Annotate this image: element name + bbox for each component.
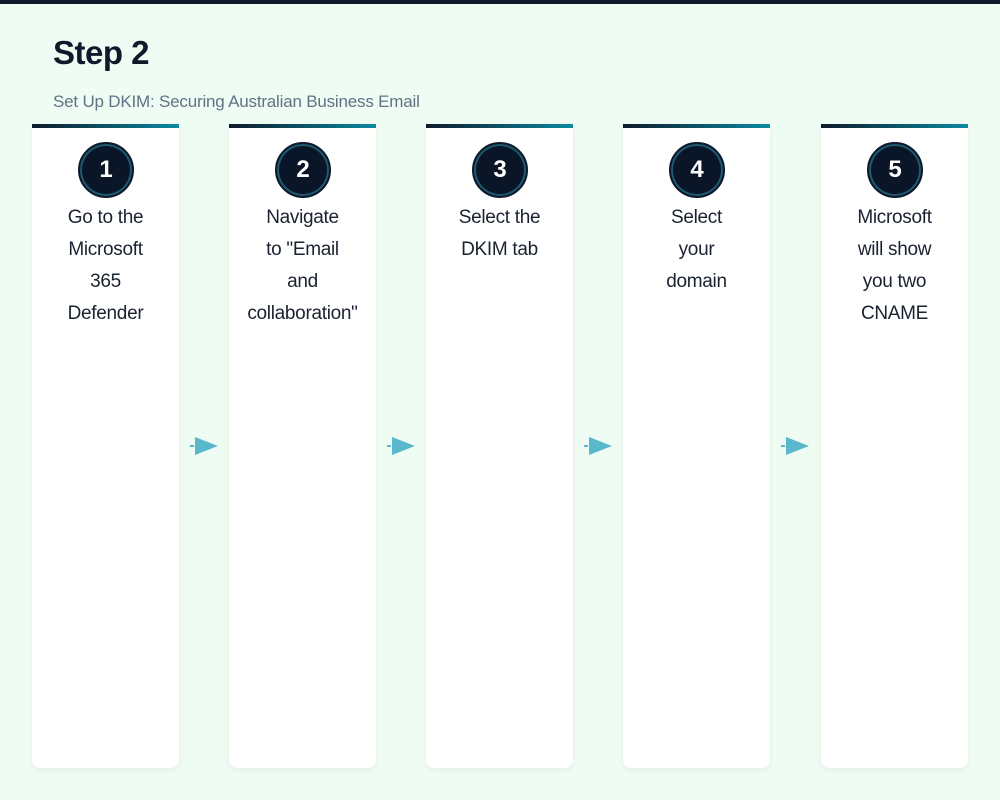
step number 5 bbox=[867, 142, 923, 198]
step 1 text: Microsoft bbox=[68, 239, 143, 260]
arrow 3 bbox=[584, 437, 612, 455]
step 1 text bbox=[68, 207, 144, 324]
step 5 text: will show bbox=[858, 239, 931, 260]
step 3 text: Select the bbox=[459, 207, 540, 228]
panel: step 5 bbox=[821, 124, 968, 768]
subtitle: Set Up DKIM: Securing Australian Business Email bbox=[53, 92, 420, 111]
step 3 text bbox=[459, 207, 540, 260]
step 5 text: Microsoft bbox=[857, 207, 932, 228]
panel: step 1 bbox=[32, 124, 179, 768]
step number 5: 5 bbox=[888, 156, 902, 183]
step 1 text: Go to the bbox=[68, 207, 143, 228]
panel: step 4 bbox=[623, 124, 770, 768]
step number 4 bbox=[669, 142, 725, 198]
arrow 1 bbox=[190, 437, 218, 455]
step 3 text: DKIM tab bbox=[461, 239, 538, 260]
step 2 text: and bbox=[287, 271, 318, 292]
step number 1: 1 bbox=[99, 156, 113, 183]
step 2 text: Navigate bbox=[266, 207, 339, 228]
step 2 text: to "Email bbox=[266, 239, 339, 260]
step number 4: 4 bbox=[690, 156, 704, 183]
arrow 4 bbox=[781, 437, 809, 455]
step 4 text: domain bbox=[666, 271, 727, 292]
step 4 text: Select bbox=[671, 207, 722, 228]
step number 2: 2 bbox=[296, 156, 310, 183]
step number 2 bbox=[275, 142, 331, 198]
step 4 text: your bbox=[679, 239, 714, 260]
step 5 text: CNAME bbox=[861, 303, 928, 324]
step number 1 bbox=[78, 142, 134, 198]
title: Step 2 bbox=[53, 34, 149, 71]
arrow 2 bbox=[387, 437, 415, 455]
panel: step 3 bbox=[426, 124, 573, 768]
step 4 text bbox=[666, 207, 727, 292]
step 5 text: you two bbox=[863, 271, 926, 292]
step 1 text: Defender bbox=[68, 303, 143, 324]
step 1 text: 365 bbox=[90, 271, 121, 292]
step number 3: 3 bbox=[493, 156, 507, 183]
panel: step 2 bbox=[229, 124, 376, 768]
step 2 text: collaboration" bbox=[247, 303, 358, 324]
step 2 text bbox=[247, 207, 358, 324]
step 5 text bbox=[857, 207, 932, 324]
step number 3 bbox=[472, 142, 528, 198]
